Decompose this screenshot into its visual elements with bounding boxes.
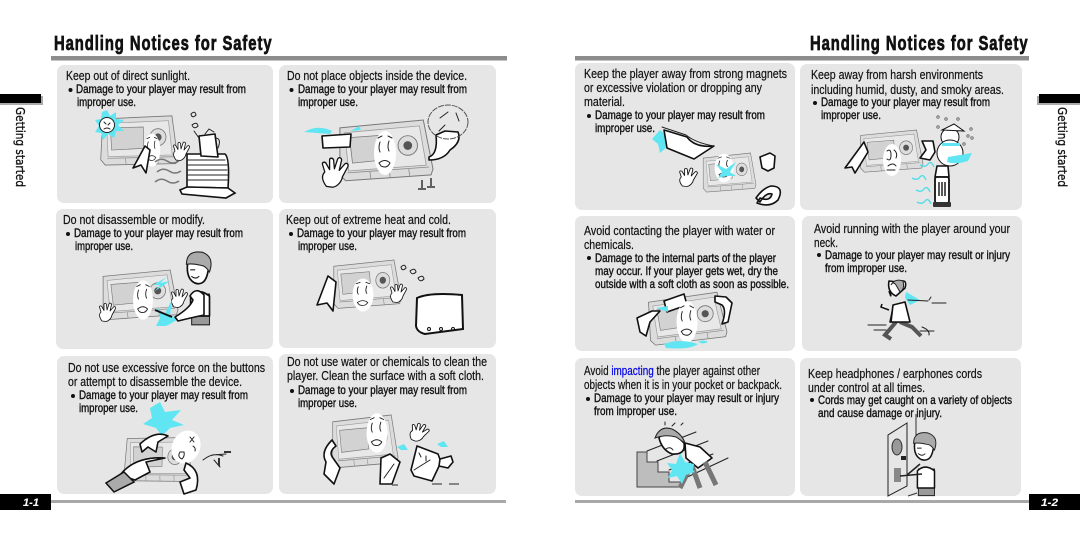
damage note: and cause damage or injury. (818, 406, 942, 420)
damage note: Damage to your player may result from (297, 226, 466, 240)
damage note (587, 251, 789, 291)
right footer rule (575, 500, 1029, 503)
panel: heat and cold (279, 209, 496, 348)
heading: or excessive violation or dropping any (584, 80, 762, 95)
damage note: Cords may get caught on a variety of objects (818, 393, 1012, 407)
illustration: running man (868, 280, 946, 339)
damage note (810, 393, 1012, 420)
panel: excessive force (57, 356, 273, 494)
panel: disassemble (56, 209, 273, 349)
heading (584, 223, 776, 252)
heading: including humid, dusty, and smoky areas. (811, 82, 1004, 97)
panel: water contact (575, 216, 795, 351)
heading: neck. (814, 235, 838, 250)
illustration: man with screwdriver (100, 252, 211, 326)
panel: objects inside (279, 65, 496, 203)
illustration: finger pressing buttons (106, 402, 231, 494)
panel: water or chemicals (279, 354, 496, 494)
heading: or attempt to disassemble the device. (68, 374, 242, 389)
panel: impacting (575, 358, 795, 496)
panel: harsh environments (800, 64, 1022, 210)
illustration: man on stairs (637, 422, 728, 488)
damage note (817, 248, 1010, 275)
left page title: Handling Notices for Safety (54, 32, 272, 55)
heading: Keep away from harsh environments (811, 67, 983, 82)
damage note: Damage to your player may result or injury (594, 391, 779, 405)
damage note: improper use. (595, 121, 655, 135)
damage note: improper use. (79, 401, 138, 415)
illustration: player near heater (317, 260, 463, 334)
damage note (587, 108, 765, 135)
heading: Avoid running with the player around your (814, 221, 1011, 236)
heading: Do not disassemble or modify. (63, 212, 205, 227)
damage note: Damage to the internal parts of the player (595, 251, 776, 265)
panel: running (802, 216, 1022, 351)
illustration: player and chemical bottles (324, 413, 459, 485)
right page number: 1-2 (1041, 497, 1058, 509)
heading: Do not use water or chemicals to clean the (287, 354, 487, 369)
panel: direct sunlight (57, 65, 273, 203)
damage note: improper use. (298, 396, 357, 410)
heading: under control at all times. (808, 380, 925, 395)
damage note: improper use. (75, 239, 133, 253)
right page title: Handling Notices for Safety (810, 32, 1028, 55)
damage note: Damage to your player may result from (298, 383, 467, 397)
heading: Keep the player away from strong magnets (584, 66, 787, 81)
heading (584, 66, 787, 109)
panel: strong magnets (575, 63, 795, 210)
heading (584, 363, 782, 392)
damage note: improper use. (298, 95, 358, 109)
damage note: Damage to your player may result from (821, 95, 990, 109)
damage note: from improper use. (825, 261, 907, 275)
damage note: Damage to your player may result from (74, 226, 243, 240)
damage note: Damage to your player may result or injury (825, 248, 1010, 262)
damage note (290, 383, 467, 410)
damage note (66, 226, 243, 253)
heading (811, 67, 1004, 97)
damage note (71, 388, 248, 415)
heading: Avoid contacting the player with water or (584, 223, 776, 238)
heading: player. Clean the surface with a soft cloth. (287, 368, 484, 383)
left page number: 1-1 (23, 497, 39, 509)
left footer rule (51, 500, 506, 503)
right title rule (575, 56, 1029, 60)
damage note: improper use. (821, 108, 881, 122)
heading: Avoid impacting the player against other (584, 363, 761, 378)
damage note: from improper use. (594, 404, 677, 418)
damage note (586, 391, 779, 418)
illustration: cup pouring into player (304, 105, 468, 189)
heading: objects when it is in your pocket or backpack. (584, 377, 782, 392)
damage note (289, 226, 466, 253)
illustration: player in sun beside stove (95, 110, 235, 198)
heading: material. (584, 94, 625, 109)
damage note: improper use. (77, 95, 136, 109)
heading (68, 360, 265, 389)
illustration: man with cord caught in door (888, 414, 936, 496)
illustration: water on player (637, 292, 732, 348)
left side label: Getting started (13, 107, 27, 187)
damage note (813, 95, 990, 122)
damage note (68, 82, 246, 109)
heading: Do not use excessive force on the buttons (68, 360, 265, 375)
right side tab (1037, 94, 1080, 105)
heading (814, 221, 1011, 250)
heading: Keep out of direct sunlight. (66, 68, 190, 83)
heading: Keep headphones / earphones cords (808, 366, 982, 381)
damage note (290, 82, 467, 109)
heading: Keep out of extreme heat and cold. (286, 212, 451, 227)
damage note: Damage to your player may result from (595, 108, 765, 122)
damage note: may occur. If your player gets wet, dry the (595, 264, 778, 278)
left side tab (0, 94, 43, 105)
damage note: Damage to your player may result from (79, 388, 248, 402)
heading: Do not place objects inside the device. (287, 68, 467, 83)
panel: cords (800, 358, 1021, 496)
heading: chemicals. (584, 237, 634, 252)
illustration: snowman, heater and cloth (845, 116, 973, 207)
illustration: book falling on player (652, 127, 780, 205)
damage note: outside with a soft cloth as soon as possible. (595, 277, 789, 291)
right page number (1029, 494, 1080, 510)
heading (287, 354, 487, 383)
left title rule (51, 56, 507, 60)
right side label: Getting started (1055, 107, 1069, 187)
damage note: Damage to your player may result from (76, 82, 246, 96)
heading (808, 366, 982, 395)
left page number (0, 494, 51, 510)
damage note: Damage to your player may result from (298, 82, 467, 96)
damage note: improper use. (298, 239, 357, 253)
